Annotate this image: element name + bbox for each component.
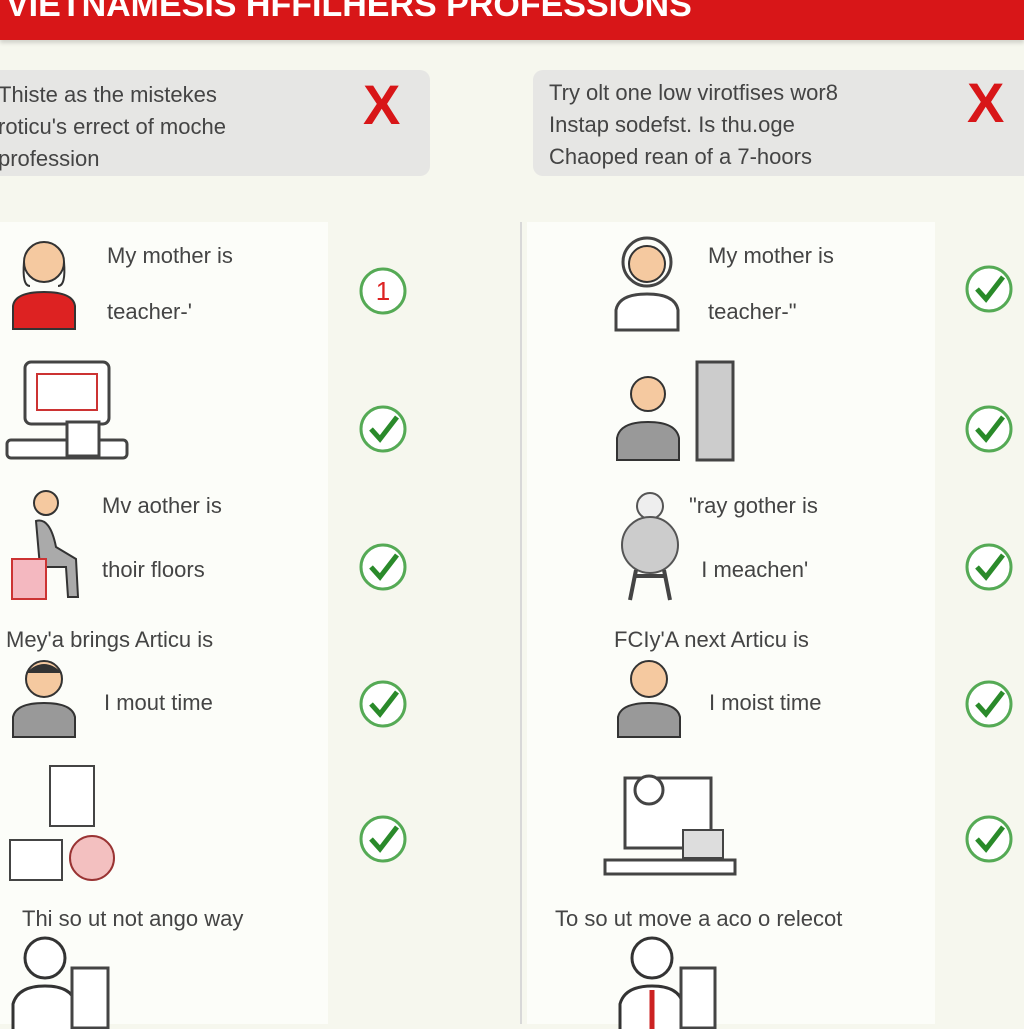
text row 3 xyxy=(689,493,818,582)
text row 6: To so ut move a aco o relecot xyxy=(555,906,842,931)
icon: woman red xyxy=(12,241,76,330)
text row 1: teacher-' xyxy=(107,299,192,324)
text row 1: teacher-" xyxy=(708,299,797,324)
icon: red X: X xyxy=(363,73,400,136)
text row 1: My mother is xyxy=(708,243,834,268)
icon: computer desk xyxy=(604,774,736,876)
text: left mistake: profession xyxy=(0,146,100,171)
icon: left circle 1 xyxy=(360,268,406,314)
text row 3: Mv aother is xyxy=(102,493,222,518)
icon: right checks xyxy=(966,266,1012,862)
icon: round figure xyxy=(621,492,679,600)
icon: headset woman xyxy=(614,236,680,332)
text row 3: I meachen' xyxy=(701,557,808,582)
text row 4: I mout time xyxy=(104,690,213,715)
text row 1: My mother is xyxy=(107,243,233,268)
text: left mistake xyxy=(0,82,226,171)
panel: left card xyxy=(0,222,328,1024)
icon: office man xyxy=(12,936,110,1029)
icon: man xyxy=(617,660,681,738)
text row 3: thoir floors xyxy=(102,557,205,582)
text row 1 xyxy=(708,243,834,324)
icon: red X: X xyxy=(967,71,1004,134)
text row 4: I moist time xyxy=(709,690,821,715)
divider xyxy=(520,222,522,1024)
icon: left circle 1: 1 xyxy=(376,276,390,306)
text: right mistake: Instap sodefst. Is thu.oge xyxy=(549,112,795,137)
text row 4 heading: FCIy'A next Articu is xyxy=(614,627,809,652)
panel: right mistake box xyxy=(533,70,1024,176)
text row 6: Thi so ut not ango way xyxy=(22,906,243,931)
text row 1 xyxy=(107,243,233,324)
icon: office man xyxy=(618,936,716,1029)
icon: documents xyxy=(9,765,115,881)
text row 4 heading: Mey'a brings Articu is xyxy=(6,627,213,652)
text: right mistake: Try olt one low virotfises wor8 xyxy=(549,80,838,105)
icon: computer xyxy=(6,360,128,460)
text row 3: "ray gother is xyxy=(689,493,818,518)
icon: seated person xyxy=(11,490,80,600)
text: right mistake xyxy=(549,80,838,169)
panel: left mistake box xyxy=(0,70,430,176)
text: right mistake: Chaoped rean of a 7-hoors xyxy=(549,144,812,169)
text: left mistake: Thiste as the mistekes xyxy=(0,82,217,107)
panel: right card xyxy=(527,222,935,1024)
icon: man xyxy=(12,660,76,738)
icon: left checks xyxy=(360,406,406,862)
icon: man with door xyxy=(616,360,734,462)
header bar xyxy=(0,0,1024,40)
text: left mistake: roticu's errect of moche xyxy=(0,114,226,139)
text row 3 xyxy=(102,493,222,582)
